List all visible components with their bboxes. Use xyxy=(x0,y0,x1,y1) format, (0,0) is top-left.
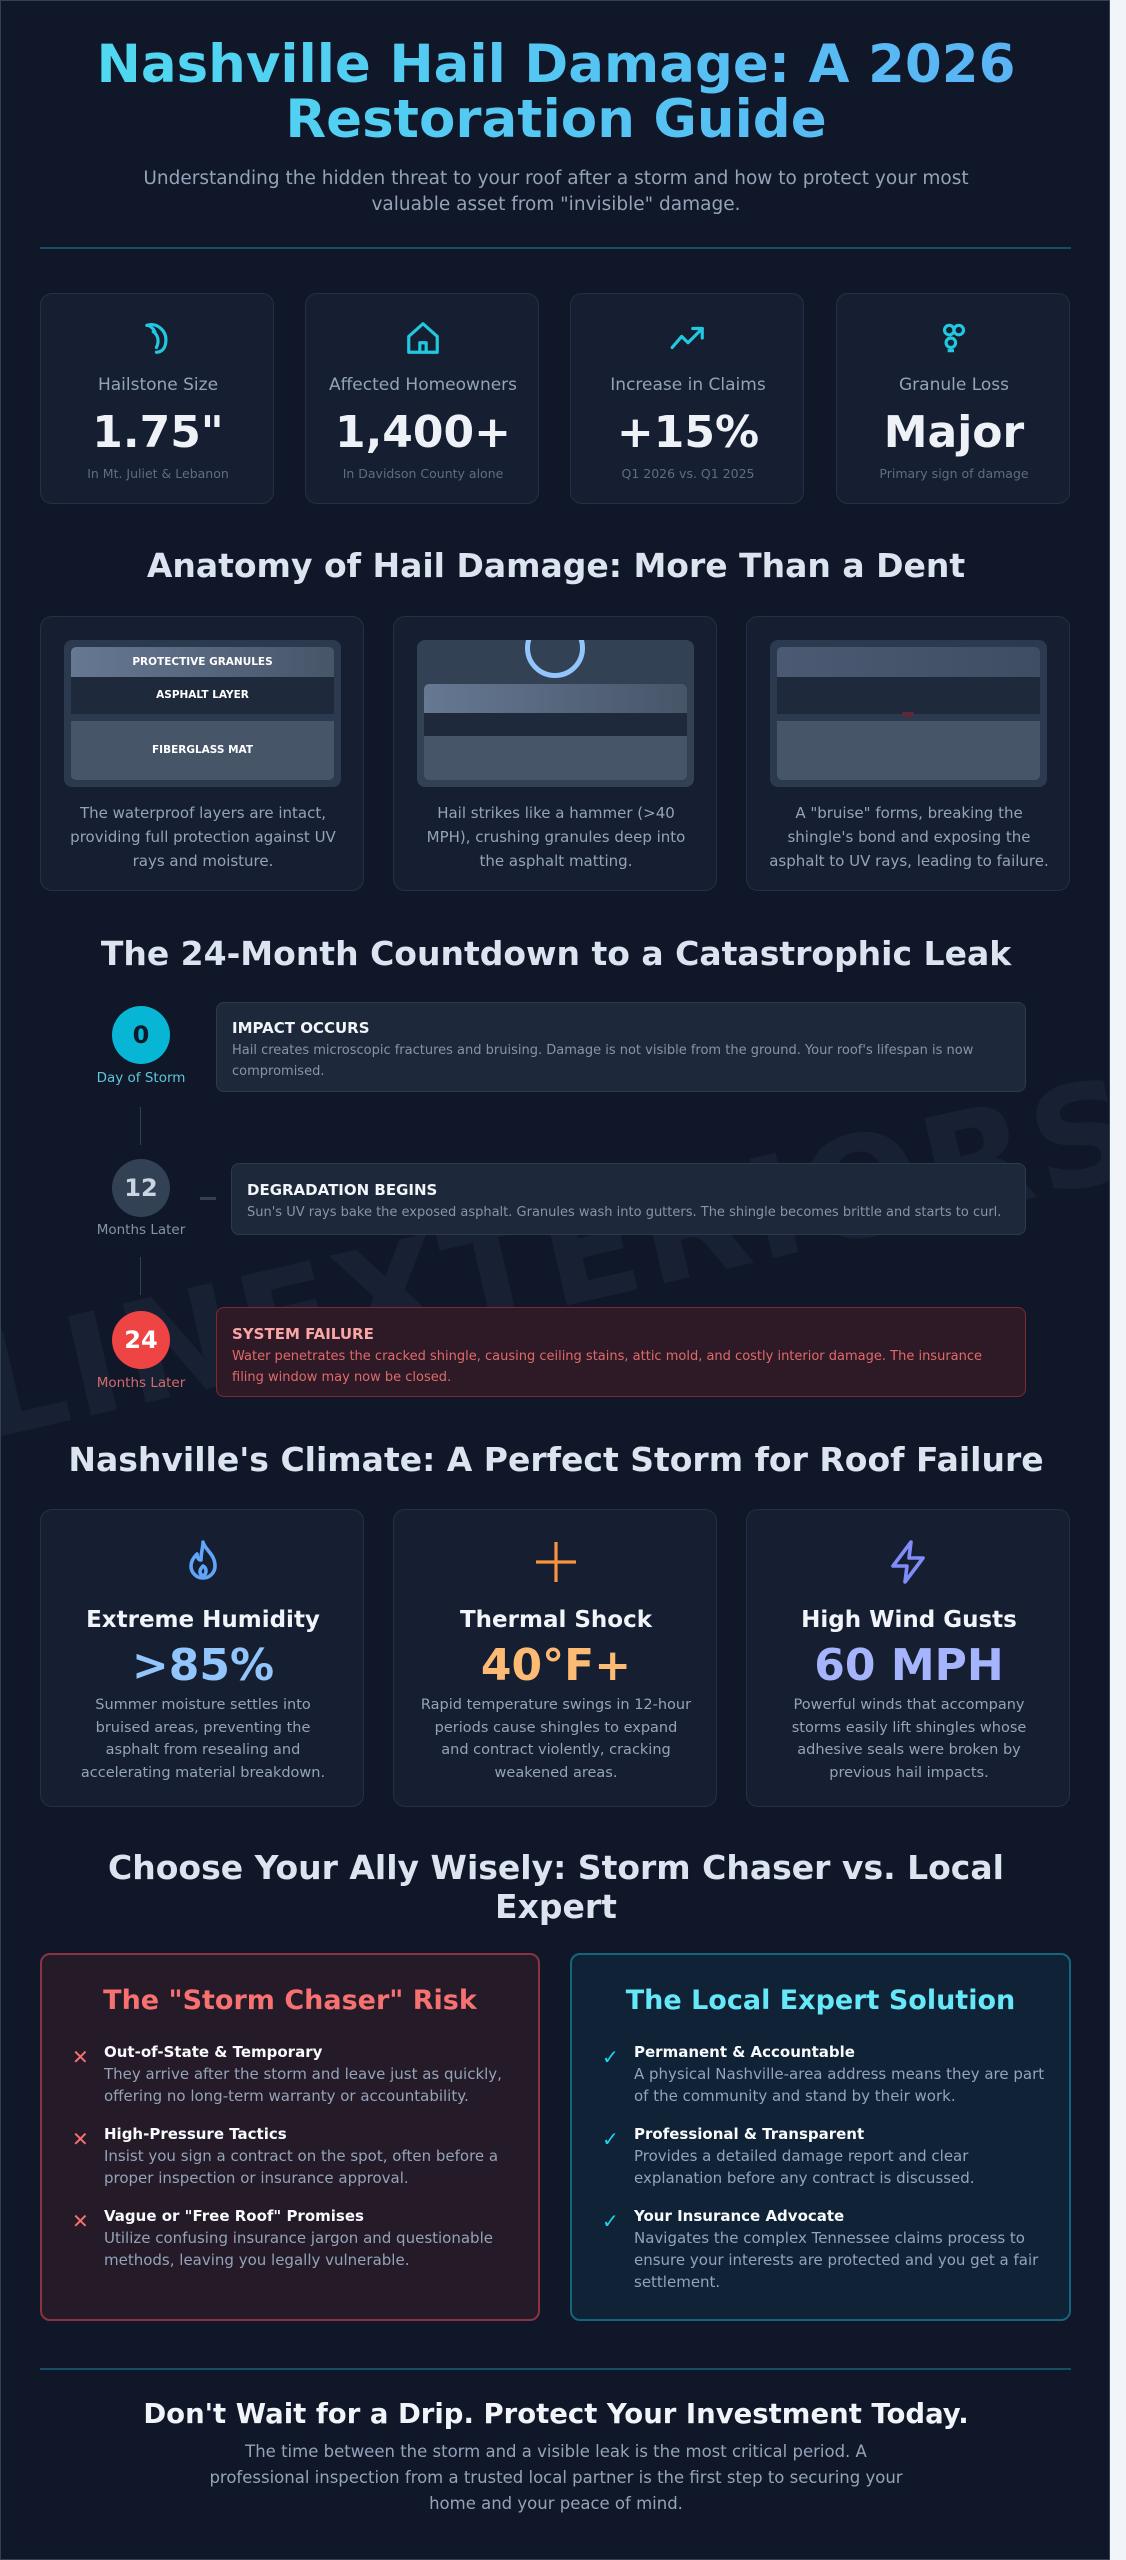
panel: storm chaser: ✕ xyxy=(72,2209,89,2233)
panel: bruise: A "bruise" forms, breaking the shingle's bond and exposing the asphalt to UV rays, leading to failure. xyxy=(769,804,1049,870)
card: degradation: DEGRADATION BEGINS xyxy=(247,1181,437,1199)
item xyxy=(72,2207,493,2269)
diagram: hail strike xyxy=(417,640,694,787)
panel: local expert: ✓ xyxy=(602,2045,619,2069)
item xyxy=(72,2043,502,2105)
title: Nashville Hail Damage: A 2026 xyxy=(96,34,1016,95)
card: degradation xyxy=(231,1163,1026,1235)
stat card: granule loss: Primary sign of damage xyxy=(879,466,1029,481)
item xyxy=(602,2207,1038,2291)
stat card: homeowners: In Davidson County alone xyxy=(343,466,503,481)
card: failure: Water penetrates the cracked shingle, causing ceiling stains, attic mold, and costly interior damage. The insurance filing window may now be closed. xyxy=(232,1349,982,1385)
icon: trend up xyxy=(670,326,704,350)
card: failure: SYSTEM FAILURE xyxy=(232,1325,374,1343)
panel: intact shingle xyxy=(40,616,364,891)
panel: storm chaser: They arrive after the storm and leave just as quickly, offering no long-term warranty or accountability. xyxy=(104,2065,502,2105)
panel: intact shingle: The waterproof layers are intact, providing full protection against UV rays and moisture. xyxy=(70,804,336,870)
diagram: layers: ASPHALT LAYER xyxy=(156,689,249,701)
stat card: claims: +15% xyxy=(617,407,759,458)
panel: impact: Hail strikes like a hammer (>40 MPH), crushing granules deep into the asphalt matting. xyxy=(427,804,685,870)
heading: countdown: The 24-Month Countdown to a Catastrophic Leak xyxy=(101,934,1011,973)
panel: wind: High Wind Gusts xyxy=(801,1607,1017,1633)
panel: storm chaser: ✕ xyxy=(72,2045,89,2069)
stat card: claims xyxy=(570,293,804,504)
panel: humidity: Summer moisture settles into bruised areas, preventing the asphalt from resealing and accelerating material breakdown. xyxy=(81,1697,325,1780)
icon: hailstone xyxy=(145,323,168,354)
panel: local expert xyxy=(570,1953,1071,2321)
diagram: layers xyxy=(64,640,341,787)
card: failure xyxy=(216,1307,1026,1397)
timeline step 24 xyxy=(97,1307,1026,1397)
panel: local expert: Navigates the complex Tennessee claims process to ensure your interests are protected and you get a fair settlement. xyxy=(634,2229,1038,2291)
CTA text: The time between the storm and a visible leak is the most critical period. A professional inspection from a trusted local partner is the first step to securing your home and your peace of mind. xyxy=(209,2442,903,2513)
icon: plus xyxy=(536,1542,576,1582)
icon: house xyxy=(407,322,439,354)
item xyxy=(602,2043,1044,2105)
panel: humidity xyxy=(40,1509,364,1807)
panel: storm chaser: Out-of-State & Temporary xyxy=(104,2043,322,2061)
stat card: claims: Q1 2026 vs. Q1 2025 xyxy=(622,466,754,481)
panel: local expert: The Local Expert Solution xyxy=(626,1985,1015,2016)
title xyxy=(1,37,1111,147)
stat card: homeowners: Affected Homeowners xyxy=(329,375,517,395)
panel: humidity: Extreme Humidity xyxy=(86,1607,320,1633)
panel: storm chaser: High-Pressure Tactics xyxy=(104,2125,287,2143)
diagram: layers: PROTECTIVE GRANULES xyxy=(132,656,273,668)
panel: storm chaser: Insist you sign a contract on the spot, often before a proper inspection or insurance approval. xyxy=(104,2147,498,2187)
icon: flame xyxy=(189,1540,217,1580)
panel: storm chaser: ✕ xyxy=(72,2127,89,2151)
stat card: hailstone: Hailstone Size xyxy=(98,375,218,395)
diagram: layers: FIBERGLASS MAT xyxy=(152,744,253,756)
panel: local expert: ✓ xyxy=(602,2127,619,2151)
icon: granules xyxy=(942,324,966,352)
stat card: homeowners: 1,400+ xyxy=(335,407,511,458)
timeline step 0: Day of Storm xyxy=(97,1070,185,1086)
panel: local expert: Your Insurance Advocate xyxy=(634,2207,844,2225)
panel: storm chaser: The "Storm Chaser" Risk xyxy=(103,1985,477,2016)
panel: local expert: Permanent & Accountable xyxy=(634,2043,855,2061)
card: degradation: Sun's UV rays bake the exposed asphalt. Granules wash into gutters. The shingle becomes brittle and starts to curl. xyxy=(247,1205,1001,1220)
item xyxy=(72,2125,498,2187)
timeline step 0: 0 xyxy=(133,1021,149,1049)
CTA heading: Don't Wait for a Drip. Protect Your Investment Today. xyxy=(143,2398,969,2430)
heading: climate: Nashville's Climate: A Perfect Storm for Roof Failure xyxy=(68,1440,1044,1479)
panel: bruise xyxy=(746,616,1070,891)
panel: humidity: >85% xyxy=(132,1640,274,1691)
heading: choose ally: Choose Your Ally Wisely: Storm Chaser vs. Local Expert xyxy=(108,1848,1004,1926)
card: impact: Hail creates microscopic fractures and bruising. Damage is not visible from the ground. Your roof's lifespan is now compromised. xyxy=(232,1043,973,1079)
panel: thermal: Thermal Shock xyxy=(460,1607,652,1633)
panel: local expert: A physical Nashville-area address means they are part of the community and stand by their work. xyxy=(634,2065,1044,2105)
panel: impact xyxy=(393,616,717,891)
timeline step 0 xyxy=(97,1002,1026,1092)
panel: local expert: Professional & Transparent xyxy=(634,2125,864,2143)
stat card: homeowners xyxy=(305,293,539,504)
icon: lightning xyxy=(891,1540,925,1584)
timeline step 24: Months Later xyxy=(97,1375,185,1391)
stat card: claims: Increase in Claims xyxy=(610,375,766,395)
stat card: granule loss: Major xyxy=(884,407,1024,458)
panel: local expert: Provides a detailed damage report and clear explanation before any contract is discussed. xyxy=(634,2147,975,2187)
stat card: hailstone: 1.75" xyxy=(92,407,224,458)
heading: anatomy: Anatomy of Hail Damage: More Than a Dent xyxy=(147,546,965,585)
panel: storm chaser xyxy=(40,1953,540,2321)
subtitle: Understanding the hidden threat to your roof after a storm and how to protect your most valuable asset from "invisible" damage. xyxy=(143,168,969,215)
timeline step 24: 24 xyxy=(124,1326,158,1354)
stat card: granule loss xyxy=(836,293,1070,504)
panel: thermal: Rapid temperature swings in 12-hour periods cause shingles to expand and contract violently, cracking weakened areas. xyxy=(421,1697,691,1780)
timeline step 12: 12 xyxy=(124,1174,158,1202)
panel: wind: Powerful winds that accompany storms easily lift shingles whose adhesive seals were broken by previous hail impacts. xyxy=(792,1697,1026,1780)
panel: storm chaser: Utilize confusing insurance jargon and questionable methods, leaving you legally vulnerable. xyxy=(104,2229,493,2269)
title: Restoration Guide xyxy=(285,89,827,150)
panel: local expert: ✓ xyxy=(602,2209,619,2233)
item xyxy=(602,2125,975,2187)
timeline step 12: Months Later xyxy=(97,1222,185,1238)
timeline step 12 xyxy=(97,1159,1026,1238)
panel: wind xyxy=(746,1509,1070,1807)
panel: thermal: 40°F+ xyxy=(481,1640,631,1691)
card: impact: IMPACT OCCURS xyxy=(232,1019,370,1037)
stat card: hailstone xyxy=(40,293,274,504)
stat card: hailstone: In Mt. Juliet & Lebanon xyxy=(87,466,229,481)
panel: storm chaser: Vague or "Free Roof" Promises xyxy=(104,2207,364,2225)
panel: thermal xyxy=(393,1509,717,1807)
card: impact xyxy=(216,1002,1026,1092)
stat card: granule loss: Granule Loss xyxy=(899,375,1009,395)
diagram: bruise xyxy=(770,640,1047,787)
panel: wind: 60 MPH xyxy=(814,1640,1004,1691)
